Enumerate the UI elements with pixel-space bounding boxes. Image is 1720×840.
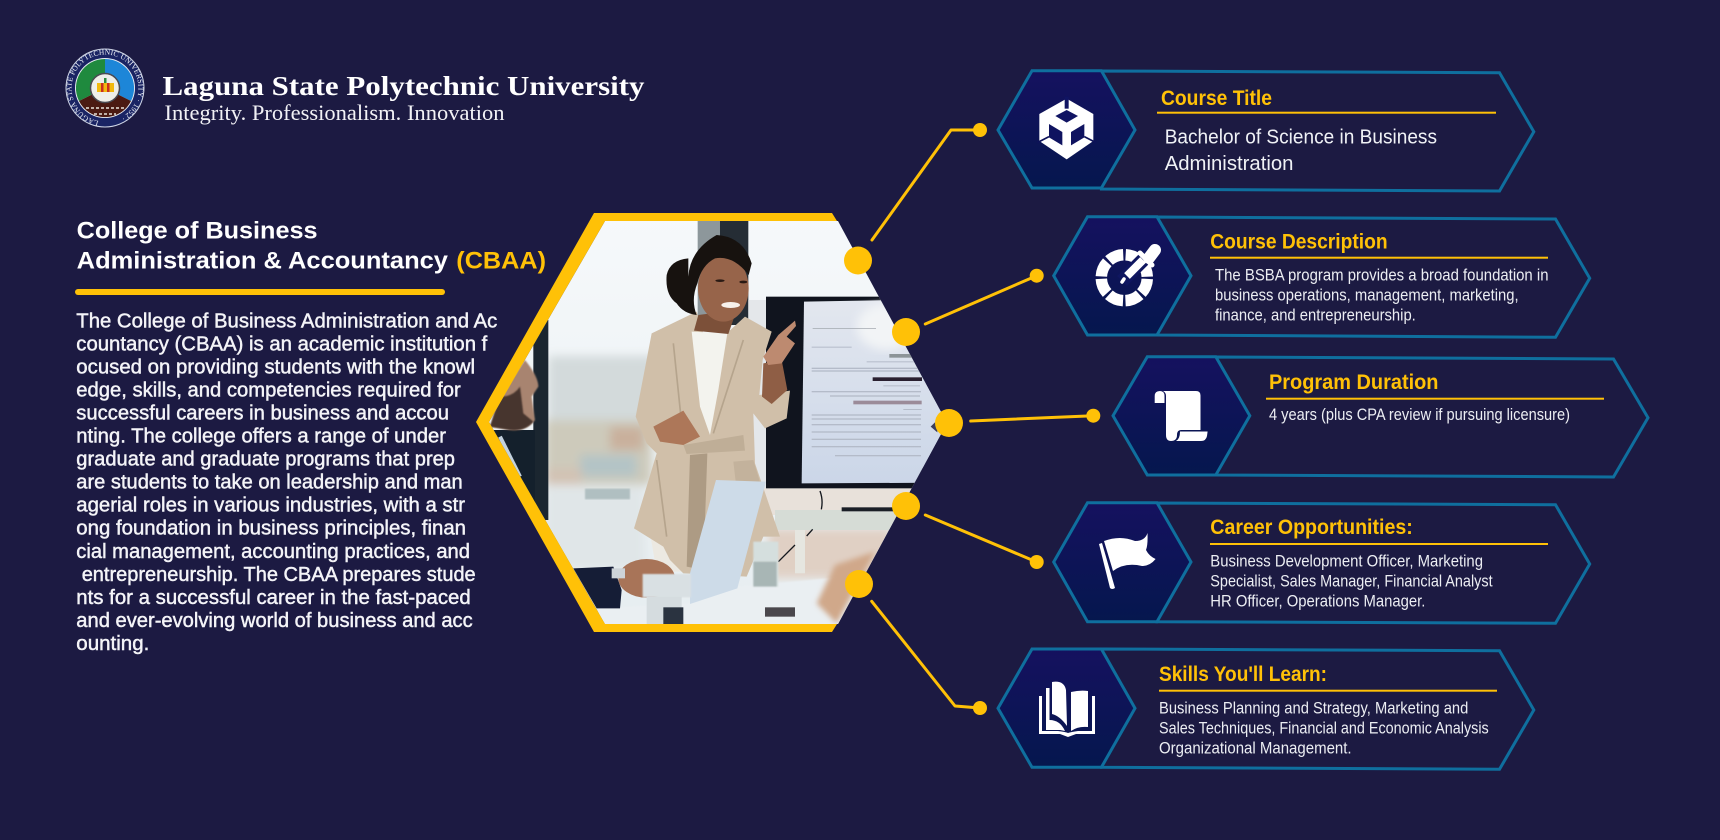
text: course description body: finance, and entrepreneurship. (1215, 307, 1416, 325)
text block: college description: are students to take on leadership and man (76, 472, 463, 494)
woman (651, 539, 681, 572)
text: skills body: Sales Techniques, Financial and Economic Analysis (1159, 719, 1489, 737)
text block: college description: ong foundation in business principles, finan (76, 518, 466, 540)
text block: college description: ounting. (76, 633, 149, 655)
text: course description body: The BSBA program provides a broad foundation in (1215, 267, 1548, 285)
text block: college description: nting. The college offers a range of under (76, 426, 446, 448)
icon: scroll (1155, 391, 1208, 441)
icon: university seal: LAGUNA STATE POLYTECHNIC UNIVERSITY · 1952 · (66, 50, 144, 126)
text: career opportunities body (1210, 553, 1493, 611)
heading: program duration: Program Duration (1269, 371, 1438, 394)
text block: college description: graduate and graduate programs that prep (76, 449, 455, 471)
panel: skills you'll learn (998, 649, 1534, 769)
table and laptop (597, 542, 847, 627)
connector 1: photo to course title (844, 123, 987, 274)
text: skills body: Business Planning and Strategy, Marketing and (1159, 699, 1468, 717)
panel: course description (1054, 217, 1590, 337)
header: university logo and name (66, 48, 645, 128)
heading: course description: Course Description (1210, 230, 1388, 253)
text: course title value: Administration (1165, 152, 1294, 175)
photo: presenter in meeting room inside hexagon (489, 221, 941, 624)
text: course description body: business operations, management, marketing, (1215, 287, 1519, 305)
heading: college name: (CBAA) (456, 247, 546, 274)
connector 2: photo to course description (892, 269, 1044, 346)
connector 3: photo to program duration (935, 409, 1100, 437)
heading: career opportunities: Career Opportunities: (1210, 516, 1413, 539)
heading: college name: College of Business (77, 217, 318, 244)
text: career opportunities body: Specialist, Sales Manager, Financial Analyst (1210, 573, 1493, 591)
university name: Laguna State Polytechnic University (162, 71, 645, 101)
text block: college description: countancy (CBAA) is an academic institution f (76, 333, 488, 355)
text block: college description (76, 310, 497, 655)
icon: target and eyedropper (1101, 250, 1155, 301)
photo frame: yellow hexagon border (476, 213, 837, 632)
text block: college description: nts for a successful career in the fast-paced (76, 587, 471, 609)
text: course description body (1215, 267, 1548, 325)
text block: college description: entrepreneurship. The CBAA prepares stude (82, 564, 476, 586)
panel: career opportunities (1054, 503, 1590, 623)
text block: college description: successful careers in business and accou (76, 402, 449, 424)
connector 5: photo to skills (845, 570, 987, 715)
connector 4: photo to career opportunities (892, 492, 1044, 569)
text block: college description: cial management, accounting practices, and (76, 541, 470, 563)
text block: college description: agerial roles in various industries, with a str (76, 495, 465, 517)
icon: open book (1039, 682, 1095, 737)
text: career opportunities body: Business Development Officer, Marketing (1210, 553, 1483, 571)
heading: college name (77, 217, 546, 274)
heading: skills you'll learn: Skills You'll Learn: (1159, 663, 1327, 686)
text block: college description: The College of Business Administration and Ac (76, 310, 497, 332)
text: course title value: Bachelor of Science in Business (1165, 125, 1437, 148)
text: skills body (1159, 699, 1489, 757)
left man (494, 430, 535, 502)
panel: program duration (1113, 357, 1648, 477)
text block: college description: and ever-evolving world of business and acc (76, 610, 473, 632)
text block: college description: ocused on providing students with the knowl (76, 356, 475, 378)
panel: course title (998, 71, 1534, 191)
university motto: Integrity. Professionalism. Innovation (164, 100, 504, 125)
heading: college name: Administration & Accountancy (77, 247, 449, 274)
text: course title value (1165, 125, 1437, 175)
heading underline (75, 289, 445, 295)
text: program duration body: 4 years (plus CPA review if pursuing licensure) (1269, 406, 1570, 424)
text: career opportunities body: HR Officer, Operations Manager. (1210, 593, 1425, 611)
text block: college description: edge, skills, and competencies required for (76, 379, 461, 401)
icon: flag (1099, 533, 1156, 589)
heading: course title: Course Title (1161, 87, 1272, 110)
text: skills body: Organizational Management. (1159, 739, 1352, 757)
icon: unity cube (1037, 97, 1096, 159)
